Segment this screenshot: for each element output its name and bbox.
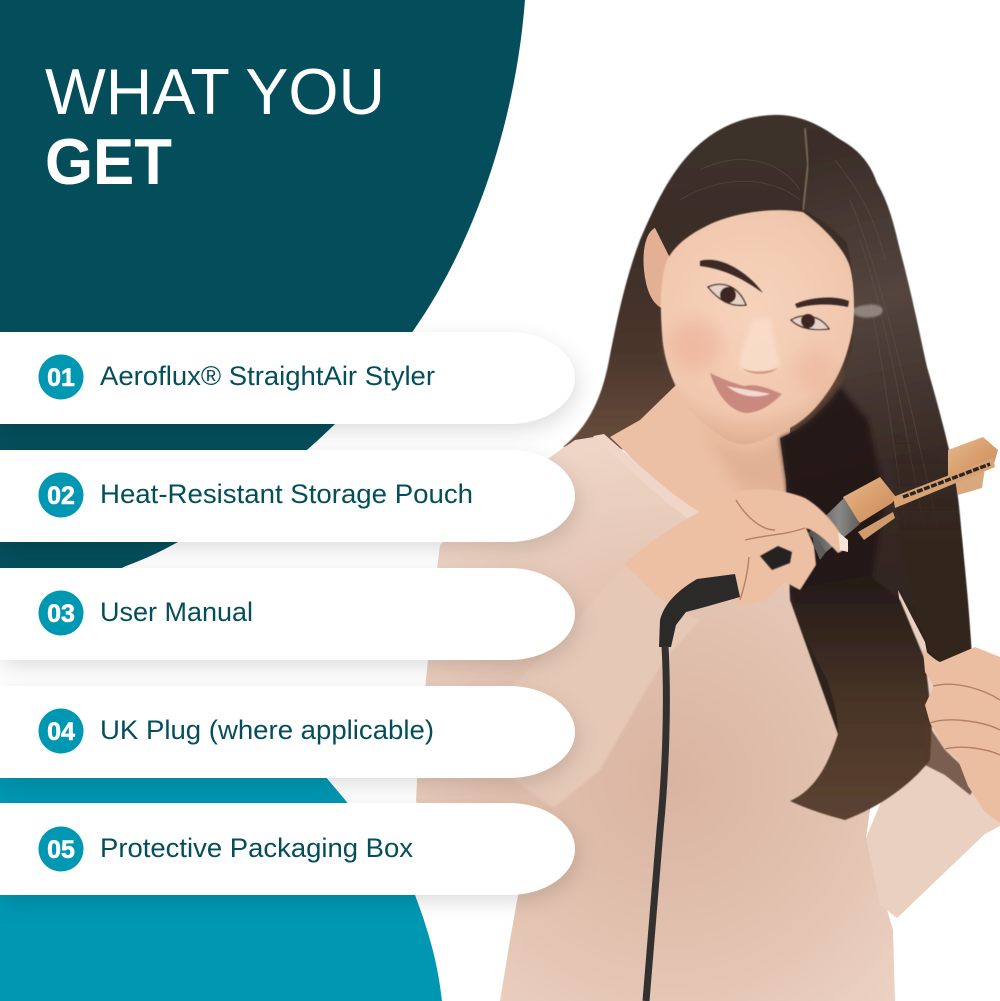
label 1: Aeroflux® StraightAir Styler bbox=[100, 361, 435, 391]
list item 1 bbox=[0, 332, 575, 424]
dark hair by neck bbox=[780, 387, 885, 610]
number badge 02: 02 bbox=[47, 482, 75, 510]
label 3: User Manual bbox=[100, 597, 253, 627]
pill 2 bbox=[0, 450, 575, 542]
copper piece under plate bbox=[955, 468, 985, 495]
front hair falling right bbox=[780, 128, 972, 734]
pill 3 bbox=[0, 568, 575, 660]
number badge 01 bbox=[38, 354, 84, 400]
cheek blush bbox=[669, 319, 721, 371]
number badge 05: 05 bbox=[47, 836, 75, 864]
hair strand lines bbox=[680, 160, 945, 620]
dark handle between the fingers bbox=[760, 546, 792, 570]
styler handle and plug bbox=[659, 574, 740, 647]
left eyebrow bbox=[700, 260, 763, 293]
pill 1 bbox=[0, 332, 575, 424]
list item 5 bbox=[0, 803, 575, 895]
number badge 03 bbox=[38, 590, 84, 636]
hand holding the hair bbox=[923, 647, 1000, 823]
nail bbox=[838, 532, 848, 552]
number badge 03: 03 bbox=[47, 600, 75, 628]
forearm sleeve bbox=[500, 563, 700, 808]
shirt torso and sleeve bbox=[416, 436, 900, 1001]
neck shadow bbox=[700, 425, 795, 500]
lips bbox=[710, 373, 782, 413]
list item 3 bbox=[0, 568, 575, 660]
nose under shadow bbox=[742, 368, 778, 374]
straight section of hair held in hand bbox=[892, 430, 972, 665]
pill 5 bbox=[0, 803, 575, 895]
styler grey collar bbox=[808, 498, 860, 552]
number badge 05 bbox=[38, 826, 84, 872]
pill 4 bbox=[0, 686, 575, 778]
left eye bbox=[708, 284, 746, 305]
finger lines on left hand bbox=[930, 684, 1000, 755]
power cable bbox=[646, 646, 666, 1001]
steam wisp bbox=[850, 305, 883, 318]
hand holding the styler bbox=[625, 490, 848, 605]
list item 2 bbox=[0, 450, 575, 542]
title: WHAT YOU bbox=[45, 55, 385, 128]
number badge 01: 01 bbox=[47, 364, 75, 392]
wispy hair ends bbox=[925, 720, 979, 795]
number badge 04: 04 bbox=[47, 718, 75, 746]
styler body copper bbox=[843, 477, 896, 523]
styler head copper bbox=[948, 437, 998, 480]
hair part bbox=[803, 128, 808, 210]
background shape: dark teal curved panel bbox=[0, 0, 525, 620]
label 5: Protective Packaging Box bbox=[100, 833, 414, 863]
number badge 04 bbox=[38, 708, 84, 754]
neck bbox=[610, 385, 790, 520]
label 2: Heat-Resistant Storage Pouch bbox=[100, 479, 473, 509]
right eye bbox=[791, 314, 829, 330]
photo: woman using hair styler bbox=[416, 115, 1000, 1001]
label 4: UK Plug (where applicable) bbox=[100, 715, 434, 745]
styler vented plate bbox=[893, 458, 995, 508]
finger lines on styling hand bbox=[736, 500, 805, 600]
hair mass behind the face bbox=[563, 115, 890, 470]
nose bbox=[740, 318, 780, 373]
list item 4 bbox=[0, 686, 575, 778]
right cheek blush bbox=[795, 348, 835, 392]
lower hair waves bbox=[790, 575, 932, 820]
grey handle beside fingertip bbox=[812, 531, 826, 560]
face bbox=[661, 210, 855, 444]
ear bbox=[643, 228, 672, 309]
title bbox=[45, 55, 385, 198]
number badge 02 bbox=[38, 472, 84, 518]
right eyebrow bbox=[795, 297, 849, 308]
shirt V-neck trim bbox=[593, 434, 700, 520]
lower styler plate bbox=[858, 512, 895, 540]
title: GET bbox=[45, 125, 172, 198]
right sleeve bbox=[866, 590, 1000, 918]
background shape: light teal curved panel bbox=[0, 755, 442, 1001]
